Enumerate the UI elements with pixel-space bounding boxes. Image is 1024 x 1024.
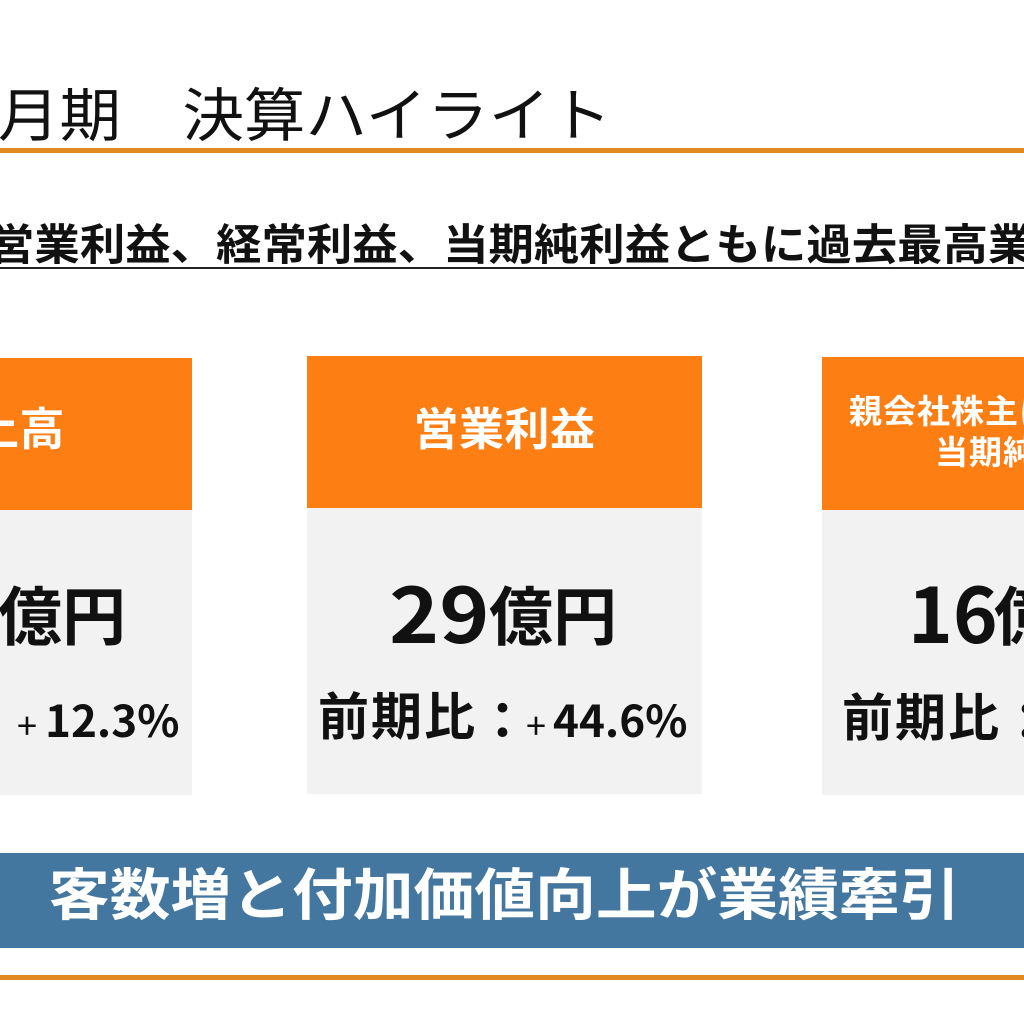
panel: sales [0,358,192,795]
title rule [0,148,1024,153]
net income header [822,357,1024,510]
bottom rule [0,975,1024,980]
operating profit value [389,555,617,665]
operating profit change: + [526,698,546,750]
title: 月期 決算ハイライト [0,84,612,149]
sales value: 億円 [0,582,126,654]
panel: net income [822,357,1024,795]
net income value: 16 [908,555,998,665]
operating profit value: 29 [389,555,489,665]
operating profit header [307,356,702,508]
summary banner [0,853,1024,948]
sales change: 12.3% [45,686,180,750]
operating profit change: 前期比： [318,689,530,750]
banner text: 客数増と付加価値向上が業績牽引 [49,864,960,927]
panel: operating profit [307,356,702,794]
operating profit change: 44.6% [553,686,688,750]
operating profit change [318,686,688,750]
operating profit header: 営業利益 [413,404,596,455]
operating profit value: 億円 [489,582,617,654]
sales header [0,358,192,510]
sales change: + [17,698,37,750]
